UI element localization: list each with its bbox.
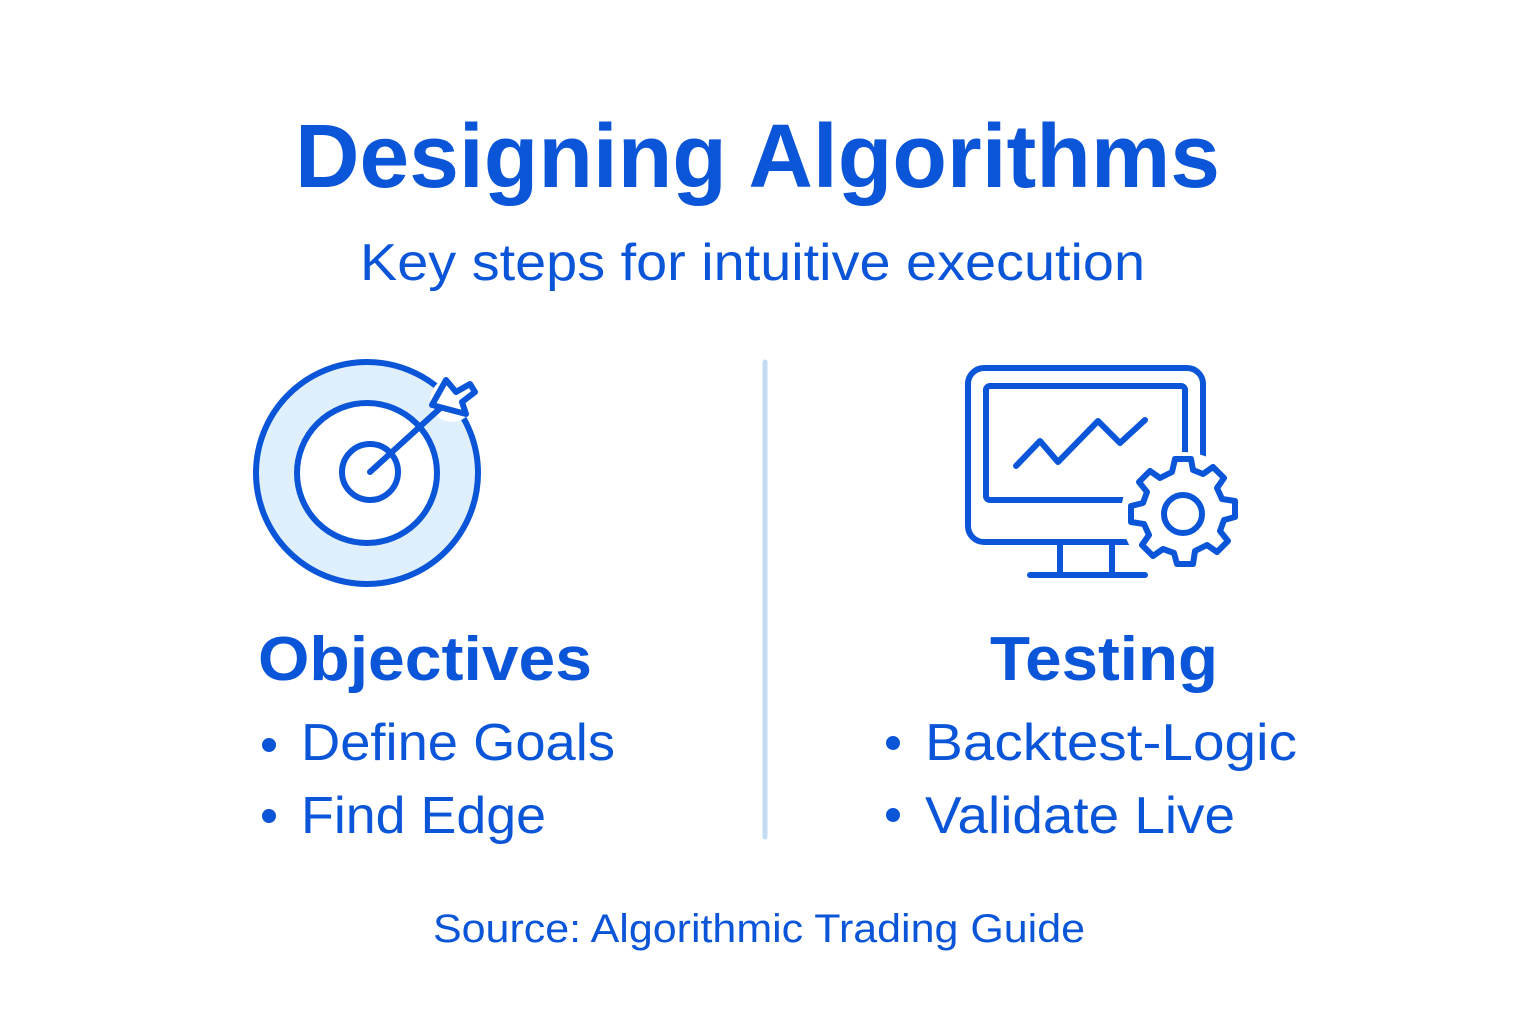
subtitle: Key steps for intuitive execution [360, 234, 1145, 292]
list: objectives: Define Goals [301, 714, 615, 772]
title: Designing Algorithms [295, 107, 1220, 207]
source note: Source: Algorithmic Trading Guide [433, 907, 1085, 951]
list: objectives [262, 714, 615, 845]
divider [762, 362, 768, 837]
list: testing: Backtest-Logic [925, 714, 1297, 772]
list: testing [886, 714, 1297, 845]
heading: Objectives: Objectives [258, 625, 592, 694]
icon: monitor with chart and gear [968, 368, 1245, 576]
list: testing: Validate Live [925, 787, 1235, 845]
list: objectives: Find Edge [301, 787, 546, 845]
icon: target with arrow [256, 362, 478, 584]
heading: Testing: Testing [990, 625, 1218, 694]
